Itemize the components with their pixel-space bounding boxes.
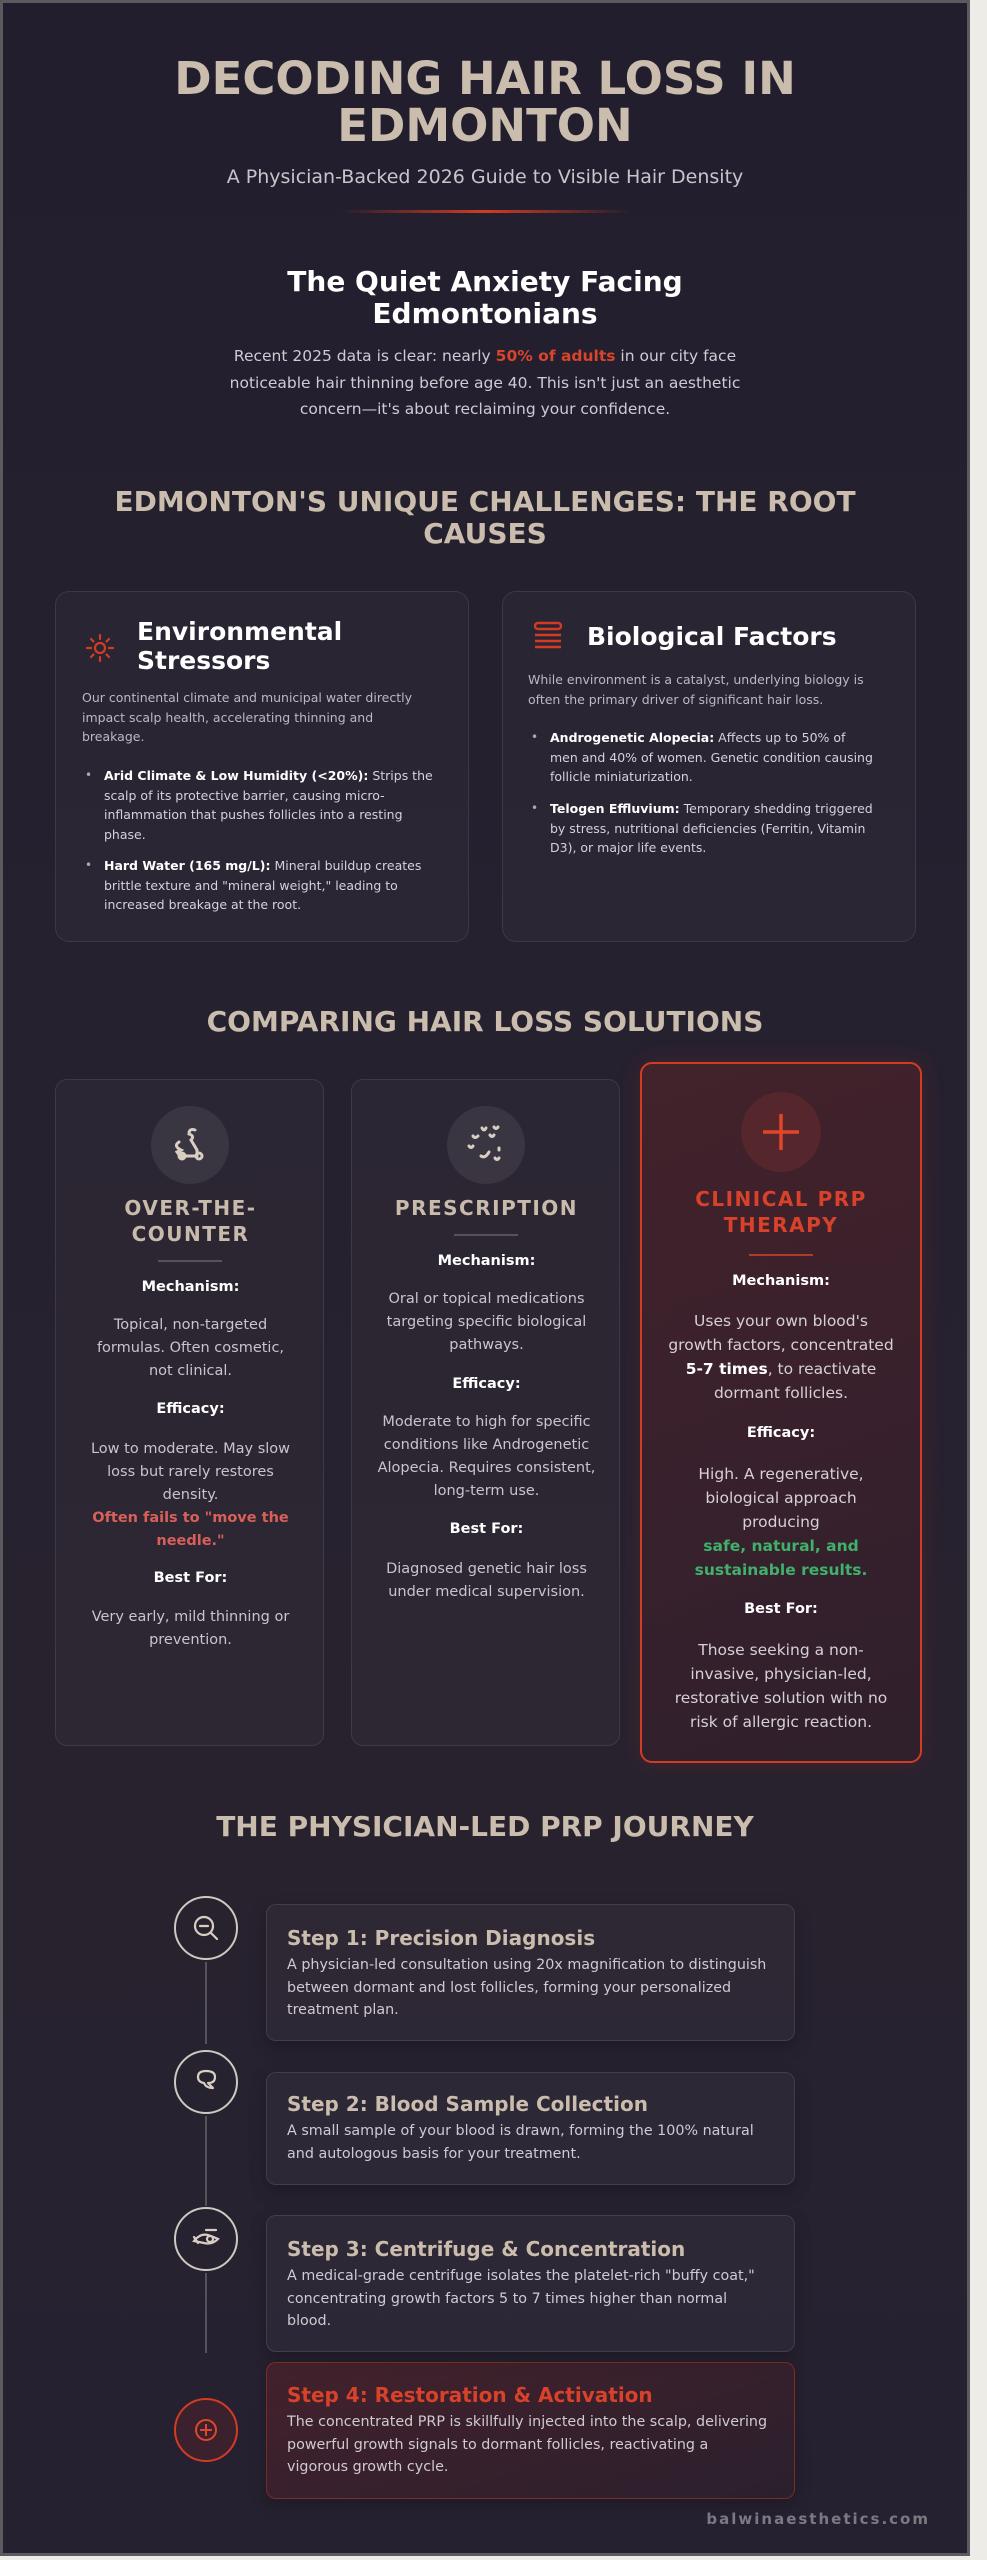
card title: PRESCRIPTION xyxy=(395,1196,578,1220)
card: clinical PRP (highlighted) xyxy=(640,1062,922,1763)
section heading: journey: THE PHYSICIAN-LED PRP JOURNEY xyxy=(216,1810,754,1843)
step 1 icon: magnifier xyxy=(174,1896,238,1960)
card: clinical PRP (highlighted): Uses your own blood's xyxy=(694,1312,868,1330)
bullet: arid climate: Arid Climate & Low Humidity (<20%): Strips the scalp of its protective barrier, causing micro-inflammation that pushes follicles into a resting phase. xyxy=(104,768,433,842)
step 2: A small sample of your blood is drawn, forming the 100% natural and autologous basis for your treatment. xyxy=(287,2123,754,2162)
intro heading: The Quiet Anxiety Facing xyxy=(287,265,683,298)
panel description: While environment is a catalyst, underlying biology is often the primary driver of significant hair loss. xyxy=(528,672,864,706)
mechanism: Mechanism: xyxy=(732,1273,830,1289)
bullet: androgenetic: follicle miniaturization. xyxy=(550,769,693,784)
card: prescription xyxy=(351,1079,620,1746)
efficacy: Efficacy: xyxy=(452,1376,521,1392)
bullet: telogen: by stress, nutritional deficiencies (Ferritin, Vitamin xyxy=(550,820,865,836)
step 3: Step 3: Centrifuge & Concentration xyxy=(287,2237,685,2261)
step 3: concentrating growth factors 5 to 7 times higher than normal xyxy=(287,2290,727,2306)
timeline connector lines xyxy=(205,1962,207,2044)
card title: CLINICAL PRP xyxy=(695,1187,867,1211)
step 2 icon: speech xyxy=(174,2050,238,2114)
best for: Best For: xyxy=(154,1570,227,1586)
card: clinical PRP (highlighted): dormant follicles. xyxy=(714,1384,848,1402)
step 1 xyxy=(266,1904,795,2041)
step 1: A physician-led consultation using 20x magnification to distinguish between dormant and lost follicles, forming your personalized treatment plan. xyxy=(287,1957,766,2018)
step 3 xyxy=(266,2215,795,2352)
card: clinical PRP (highlighted): 5-7 times, to reactivate xyxy=(686,1360,876,1378)
card title: THERAPY xyxy=(724,1213,838,1237)
icon: sun xyxy=(86,634,114,662)
step 4: vigorous growth cycle. xyxy=(287,2459,448,2475)
intro heading: Edmontonians xyxy=(372,297,598,330)
best for: Best For: xyxy=(450,1521,523,1537)
card: over-the-counter: Low to moderate. May slow loss but rarely restores density. xyxy=(91,1441,290,1503)
bullet: hard water: Hard Water (165 mg/L): Mineral buildup creates brittle texture and "mineral weight," leading to increased breakage at the root. xyxy=(104,858,421,912)
panel title: Biological Factors xyxy=(587,622,837,651)
card title xyxy=(695,1187,867,1237)
card: over-the-counter: Often fails to "move the needle." xyxy=(92,1510,289,1549)
bullet: androgenetic: Androgenetic Alopecia: Affects up to 50% of xyxy=(550,730,845,745)
bullet: telogen xyxy=(531,801,873,855)
panel: environmental: • xyxy=(85,858,92,872)
step 1: Step 1: Precision Diagnosis xyxy=(287,1926,595,1950)
step 2: Step 2: Blood Sample Collection xyxy=(287,2092,648,2116)
bullet: telogen: D3), or major life events. xyxy=(550,840,706,855)
card: clinical PRP (highlighted): safe, natural, and sustainable results. xyxy=(695,1537,867,1579)
card: over-the-counter: Very early, mild thinning or prevention. xyxy=(92,1609,289,1648)
best for: Best For: xyxy=(744,1601,818,1617)
card: prescription: Diagnosed genetic hair loss under medical supervision. xyxy=(386,1561,587,1600)
step 4 icon: plus circle xyxy=(174,2398,238,2462)
icon: pills xyxy=(447,1106,525,1184)
card: clinical PRP (highlighted): growth factors, concentrated xyxy=(668,1336,894,1354)
subtitle: A Physician-Backed 2026 Guide to Visible Hair Density xyxy=(227,166,743,188)
icon: otc xyxy=(151,1106,229,1184)
card title: COUNTER xyxy=(132,1222,249,1246)
panel: biological: • xyxy=(531,730,538,744)
mechanism: Mechanism: xyxy=(438,1253,535,1269)
step 3 icon: centrifuge xyxy=(174,2207,238,2271)
mechanism: Mechanism: xyxy=(142,1279,239,1295)
title xyxy=(174,52,796,152)
step 3: A medical-grade centrifuge isolates the platelet-rich "buffy coat," xyxy=(287,2268,755,2284)
red divider xyxy=(340,210,630,213)
step 3: blood. xyxy=(287,2313,331,2329)
step 2 xyxy=(266,2072,795,2185)
panel description: Our continental climate and municipal water directly impact scalp health, accelerating thinning and breakage. xyxy=(82,690,412,744)
footer: website: balwinaesthetics.com xyxy=(706,2510,930,2528)
card: prescription: Oral or topical medications targeting specific biological pathways. xyxy=(387,1291,586,1353)
card title xyxy=(124,1196,257,1246)
panel title: Environmental Stressors xyxy=(137,617,342,675)
section heading: causes: EDMONTON'S UNIQUE CHALLENGES: THE ROOT CAUSES xyxy=(114,485,856,550)
card title: OVER-THE- xyxy=(124,1196,257,1220)
step 4: powerful growth signals to dormant follicles, reactivating a xyxy=(287,2436,708,2452)
bullet: telogen: Telogen Effluvium: Temporary shedding triggered xyxy=(550,801,873,816)
card: over-the-counter xyxy=(55,1079,324,1746)
step 4 xyxy=(266,2362,795,2499)
icon: stack xyxy=(534,622,562,648)
bullet: androgenetic: men and 40% of women. Genetic condition causing xyxy=(550,750,873,764)
title: EDMONTON xyxy=(337,99,633,152)
panel: biological xyxy=(502,591,916,942)
intro heading xyxy=(287,265,683,330)
efficacy: Efficacy: xyxy=(156,1401,225,1417)
efficacy: Efficacy: xyxy=(747,1425,815,1441)
card: prescription: Moderate to high for specific conditions like Androgenetic Alopecia. Requires consistent, long-term use. xyxy=(378,1414,595,1499)
step 4: Step 4: Restoration & Activation xyxy=(287,2383,653,2407)
step 4: The concentrated PRP is skillfully injected into the scalp, delivering xyxy=(287,2414,767,2430)
card: clinical PRP (highlighted): High. A regenerative, biological approach producing xyxy=(698,1465,864,1531)
title: DECODING HAIR LOSS IN xyxy=(174,52,796,105)
panel: environmental: • xyxy=(85,768,92,782)
intro paragraph: Recent 2025 data is clear: nearly 50% of adults in our city face noticeable hair thinning before age 40. This isn't just an aesthetic concern—it's about reclaiming your confidence. xyxy=(230,347,740,418)
bullet: androgenetic xyxy=(531,730,873,784)
icon: plus xyxy=(741,1092,821,1172)
panel: environmental xyxy=(55,591,469,942)
panel: biological: • xyxy=(531,801,538,815)
section heading: solutions: COMPARING HAIR LOSS SOLUTIONS xyxy=(207,1005,763,1038)
card: over-the-counter: Topical, non-targeted formulas. Often cosmetic, not clinical. xyxy=(97,1317,284,1379)
card: clinical PRP (highlighted): Those seeking a non-invasive, physician-led, restorative solution with no risk of allergic reaction. xyxy=(675,1641,887,1731)
